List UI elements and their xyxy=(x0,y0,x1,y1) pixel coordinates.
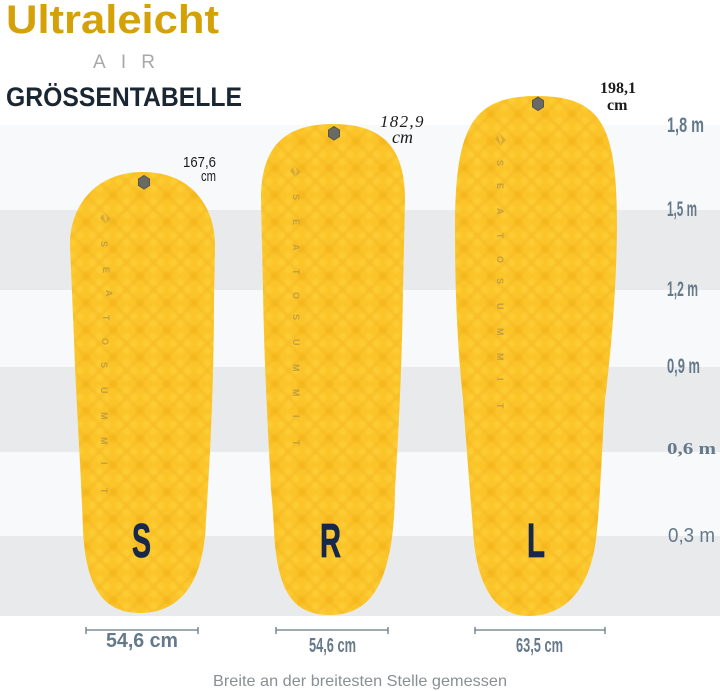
width dimension S xyxy=(86,627,198,652)
brand lettering: M xyxy=(291,389,301,396)
brand lettering: M xyxy=(495,328,505,336)
brand lettering: S xyxy=(99,241,109,247)
brand lettering: T xyxy=(101,315,111,321)
height scale labels: 0,6 m xyxy=(667,439,716,458)
brand lettering: T xyxy=(291,269,301,275)
subtitle: AIR: AIR xyxy=(93,52,155,73)
valve xyxy=(328,126,340,140)
mat: size S xyxy=(70,172,215,613)
brand lettering: T xyxy=(99,488,109,494)
length label L: cm xyxy=(607,97,628,114)
brand lettering xyxy=(99,241,114,494)
height scale labels xyxy=(667,114,716,547)
brand logo mark xyxy=(495,133,506,146)
footnote: Breite an der breitesten Stelle gemessen xyxy=(213,673,507,690)
width dimension S: 54,6 cm xyxy=(106,630,178,652)
brand lettering xyxy=(495,160,505,409)
brand lettering: M xyxy=(99,437,109,444)
length label S: 167,6 xyxy=(183,154,216,171)
width dimension L xyxy=(475,627,605,657)
size letter S: S xyxy=(132,515,151,568)
brand lettering xyxy=(291,194,301,446)
brand lettering: M xyxy=(291,364,301,372)
brand lettering: U xyxy=(291,339,301,346)
brand logo mark xyxy=(100,212,111,224)
width dimension R: 54,6 cm xyxy=(309,635,356,657)
brand lettering: S xyxy=(495,160,505,166)
brand lettering: S xyxy=(291,314,301,320)
brand lettering: S xyxy=(291,194,301,200)
brand lettering: A xyxy=(291,244,301,251)
brand lettering: S xyxy=(99,362,109,368)
brand lettering: T xyxy=(495,233,505,239)
mat: size R xyxy=(255,118,411,621)
length label R: 182,9 xyxy=(380,112,425,131)
length label L xyxy=(600,80,636,114)
height scale labels: 0,3 m xyxy=(668,525,715,547)
width dimension L: 63,5 cm xyxy=(516,635,563,657)
height scale labels: 0,9 m xyxy=(667,355,700,378)
mat: size L xyxy=(450,90,622,622)
brand lettering: E xyxy=(291,219,301,225)
brand lettering: U xyxy=(495,303,505,310)
size letter L: L xyxy=(527,515,545,568)
brand logo mark xyxy=(290,165,301,177)
height scale labels: 1,2 m xyxy=(667,278,698,301)
length label L: 198,1 xyxy=(600,80,636,97)
brand lettering: O xyxy=(291,292,301,299)
valve xyxy=(532,97,544,110)
height scale labels: 1,8 m xyxy=(667,114,704,137)
length label S: cm xyxy=(201,168,216,185)
length label R xyxy=(380,112,425,147)
brand lettering: S xyxy=(495,278,505,284)
valve xyxy=(138,176,150,189)
length label R: cm xyxy=(392,127,413,147)
heading: size chart: GRÖSSENTABELLE xyxy=(6,82,242,112)
brand lettering: I xyxy=(99,462,109,465)
brand lettering: A xyxy=(495,208,505,215)
length label S xyxy=(183,154,216,185)
brand lettering: A xyxy=(104,290,114,297)
size letter R: R xyxy=(320,515,341,568)
brand lettering: U xyxy=(99,387,109,394)
height bands background xyxy=(0,125,720,616)
brand lettering: I xyxy=(291,415,301,418)
width dimension R xyxy=(276,627,388,657)
brand lettering: O xyxy=(100,338,110,345)
brand lettering: T xyxy=(495,403,505,409)
brand lettering: E xyxy=(495,183,505,189)
brand lettering: E xyxy=(101,267,111,273)
brand lettering: M xyxy=(99,412,109,420)
brand lettering: I xyxy=(495,378,505,381)
brand lettering: M xyxy=(495,353,505,360)
brand lettering: T xyxy=(291,440,301,446)
brand lettering: O xyxy=(495,256,505,263)
height scale labels: 1,5 m xyxy=(667,198,697,221)
